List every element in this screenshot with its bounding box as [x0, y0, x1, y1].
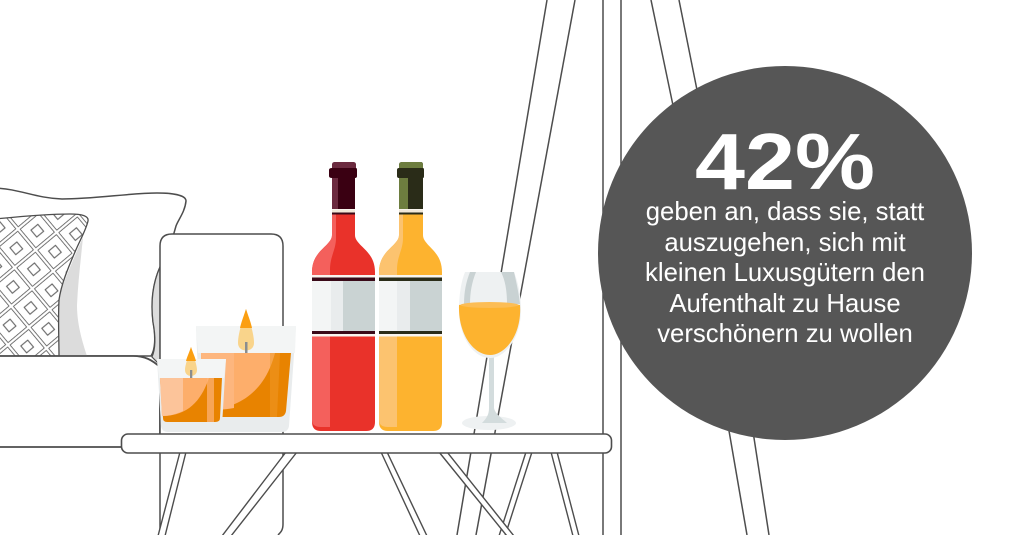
stem — [482, 355, 507, 423]
chair shadow — [152, 267, 160, 365]
cushion shadow — [58, 237, 87, 356]
red bottle — [312, 162, 375, 431]
side chair back — [160, 234, 283, 535]
wine glass — [459, 272, 521, 430]
bowl — [459, 272, 521, 358]
yellow bottle — [379, 162, 442, 431]
cap — [329, 162, 357, 209]
stat value: 42% — [695, 117, 875, 206]
stat description: Aufenthalt zu Hause — [669, 290, 901, 318]
flame — [185, 347, 197, 376]
stat circle — [598, 66, 972, 440]
table legs — [158, 452, 579, 535]
foot — [462, 416, 516, 430]
wine — [459, 303, 520, 355]
stat description: verschönern zu wollen — [657, 320, 913, 348]
floor lamp lines — [457, 0, 769, 535]
patterned pillow — [0, 214, 88, 356]
stat description — [645, 198, 925, 348]
cap — [397, 162, 424, 209]
table top — [122, 434, 612, 453]
large candle — [196, 309, 296, 432]
stat description: auszugehen, sich mit — [664, 229, 906, 257]
small candle — [157, 347, 226, 432]
stat description: geben an, dass sie, statt — [646, 198, 924, 226]
sofa seat — [0, 356, 160, 447]
white back cushion — [0, 188, 186, 356]
sofa — [0, 188, 186, 447]
flame — [238, 309, 254, 350]
stat description: kleinen Luxusgütern den — [645, 259, 925, 287]
